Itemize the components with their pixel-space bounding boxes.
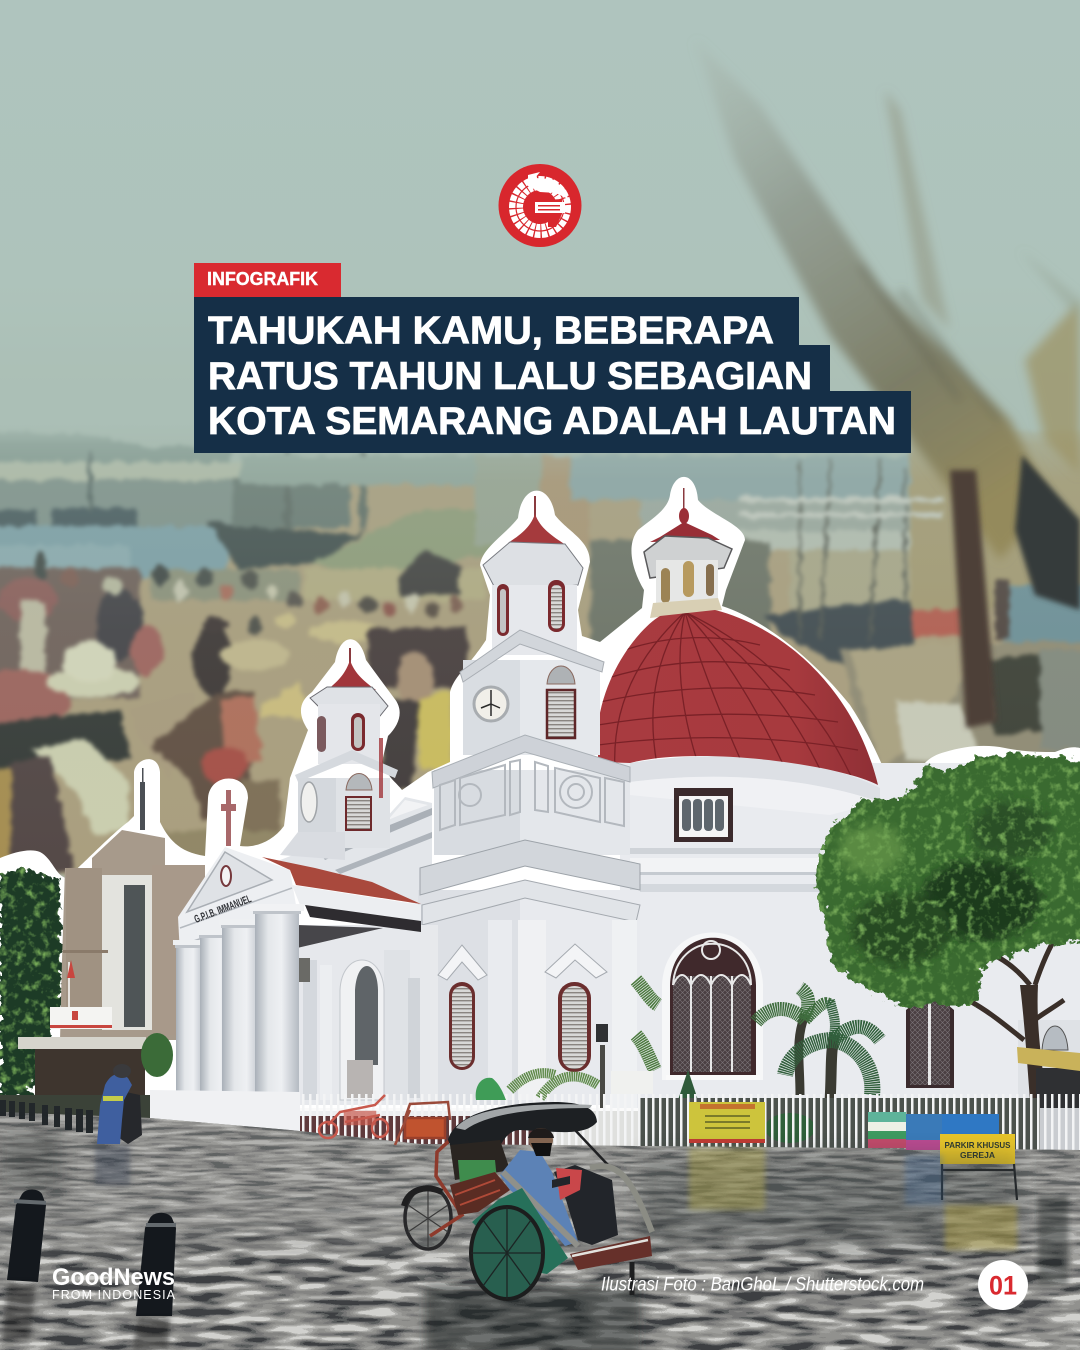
brand wordmark: GoodNews (52, 1264, 175, 1291)
page number (978, 1260, 1028, 1310)
hanging lantern (296, 958, 310, 982)
crowd (34, 551, 461, 635)
right tall window (906, 990, 954, 1088)
pink pedicabs (319, 1095, 450, 1145)
person in green raincoat (476, 1078, 506, 1100)
left tower clock (301, 782, 317, 822)
photo credit: Ilustrasi Foto : BanGhoL / Shutterstock.com (601, 1274, 924, 1296)
lamp post (596, 1024, 608, 1135)
drum and side wall of church (620, 756, 1080, 1108)
banners and parking sign (689, 1102, 1017, 1200)
fence and wall base (150, 1090, 1080, 1152)
water reflections (0, 1130, 1068, 1350)
logo (498, 164, 582, 247)
large arched stained window (662, 932, 763, 1080)
title: TAHUKAH KAMU, BEBERAPA (208, 310, 774, 352)
painting: historic Semarang harbour (0, 380, 1080, 880)
label: INFOGRAFIK: INFOGRAFIK (207, 268, 319, 289)
central clock tower (418, 496, 640, 1110)
label: INFOGRAFIK (194, 263, 341, 297)
bollards in foreground (2, 1190, 176, 1350)
rear cupola (644, 488, 732, 618)
large foreground tree (815, 754, 1080, 1200)
page number: 01 (989, 1270, 1017, 1300)
crosses on roof (140, 768, 236, 846)
faded sail rising into sky (695, 40, 1080, 728)
water (0, 1100, 1080, 1350)
person in blue raincoat with motorbike (97, 1064, 142, 1144)
yellow awning (1017, 1047, 1080, 1118)
left tower (280, 648, 398, 860)
far right arch window (1018, 1020, 1080, 1100)
small notice board (611, 1071, 653, 1094)
left tree (0, 868, 62, 1100)
hanging plant (141, 1033, 173, 1077)
masts and ship stripes (800, 460, 905, 640)
beige office building (0, 830, 205, 1121)
title: KOTA SEMARANG ADALAH LAUTAN (208, 400, 896, 443)
tower clock (474, 687, 508, 721)
banners and parking sign: GEREJA (960, 1150, 995, 1160)
passenger (500, 1128, 578, 1246)
palm trees and shrubs (510, 980, 880, 1102)
banners and parking sign: PARKIR KHUSUS (944, 1140, 1011, 1150)
nave roof between towers (275, 797, 432, 905)
bollards row at left (0, 1100, 93, 1133)
haze over painting (0, 380, 1080, 880)
drum window (674, 788, 733, 842)
sky background (0, 0, 1080, 470)
portico with columns (150, 847, 421, 1130)
office sign (50, 1007, 112, 1029)
title (194, 297, 911, 453)
entrance arch (340, 960, 384, 1100)
church name text: G.P.I.B. IMMANUEL (193, 893, 253, 926)
louvred windows with pediments (438, 945, 487, 1070)
red dome (598, 610, 878, 785)
title: RATUS TAHUN LALU SEBAGIAN (208, 355, 812, 398)
brand wordmark: FROM INDONESIA (52, 1288, 176, 1302)
becak (pedicab) (404, 1102, 652, 1299)
white cut-out outline around the church (0, 477, 1080, 1350)
